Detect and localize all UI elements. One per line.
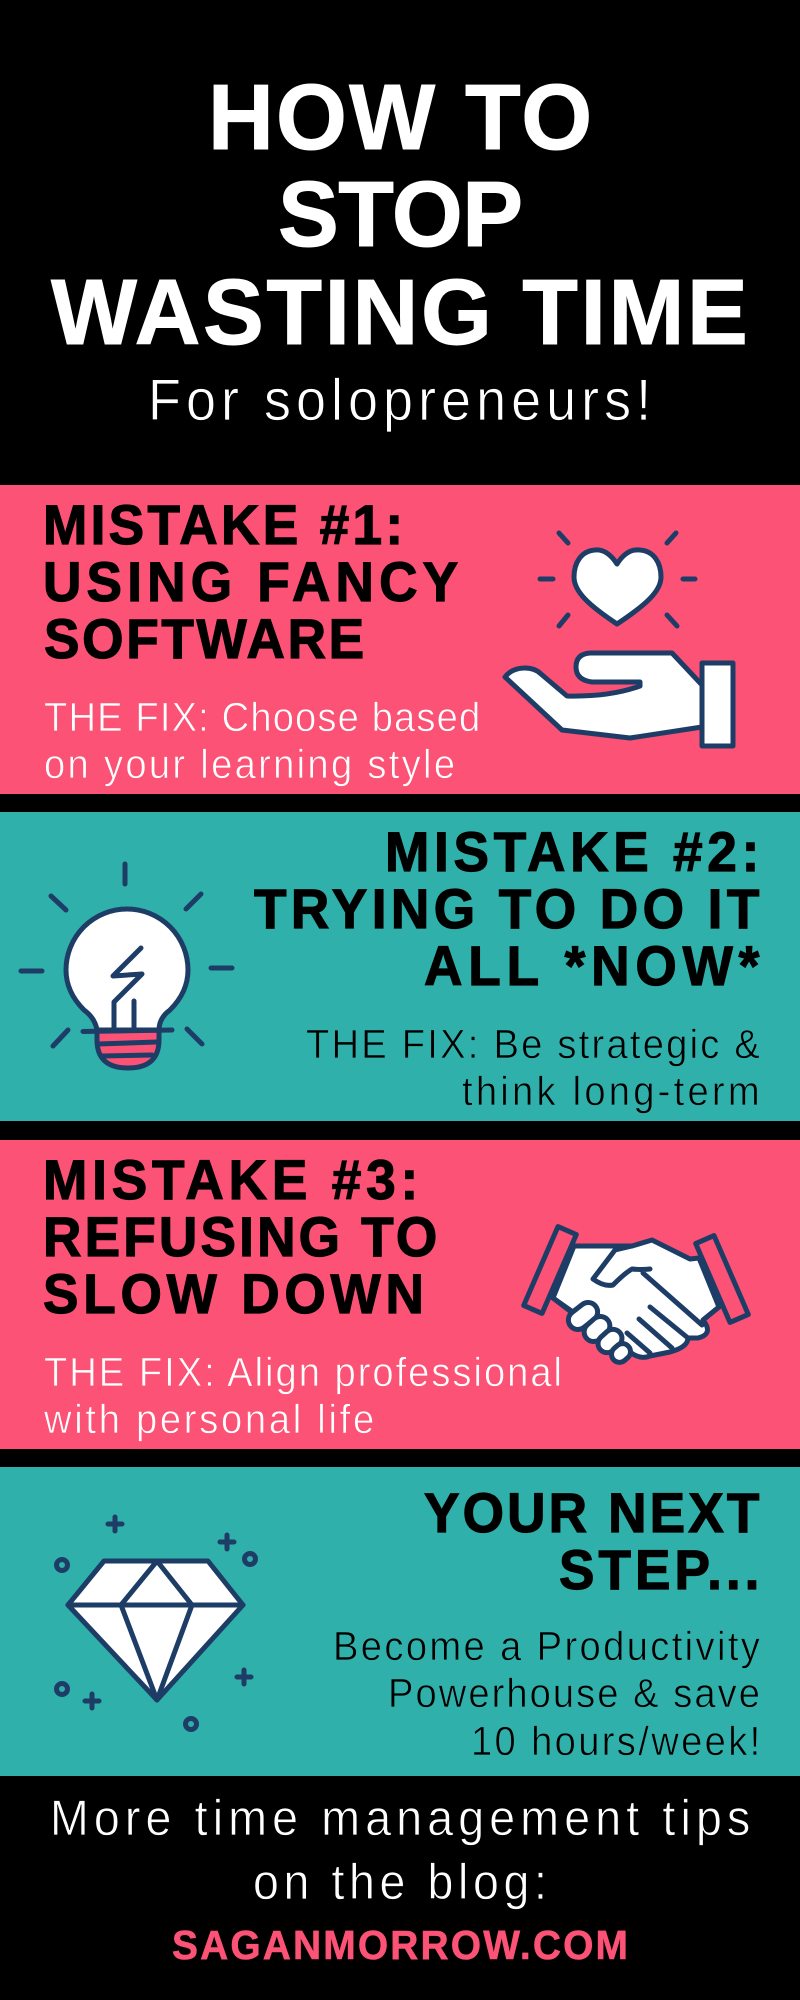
heading: next step: STEP...	[559, 1539, 759, 1601]
text: next step	[333, 1624, 760, 1764]
footer text	[50, 1790, 750, 1910]
heading: mistake 1: SOFTWARE	[44, 608, 364, 670]
text: fix 3: THE FIX: Align professional	[44, 1350, 562, 1395]
heading: mistake 2: MISTAKE #2:	[385, 821, 759, 883]
icon: light bulb	[21, 864, 232, 1068]
text: fix 3: with personal life	[43, 1397, 374, 1442]
heading: mistake 3: SLOW DOWN	[43, 1263, 424, 1325]
text: fix 3	[43, 1350, 562, 1442]
panel: mistake 1	[0, 485, 800, 794]
heading: mistake 1: MISTAKE #1:	[43, 494, 403, 556]
footer text: More time management tips	[50, 1790, 750, 1846]
icon: hand holding heart	[505, 533, 733, 746]
text: fix 1: THE FIX: Choose based	[44, 695, 480, 740]
heading: next step	[424, 1482, 759, 1601]
text: fix 1	[44, 695, 480, 787]
heading: mistake 2: TRYING TO DO IT	[254, 878, 759, 940]
heading: mistake 1: USING FANCY	[43, 551, 458, 613]
heading: mistake 3: REFUSING TO	[43, 1206, 437, 1268]
heading: mistake 1	[43, 494, 458, 670]
text: fix 1: on your learning style	[44, 742, 455, 787]
text: next step: Become a Productivity	[333, 1624, 760, 1669]
icon: diamond	[56, 1517, 256, 1730]
text: next step: Powerhouse & save	[388, 1671, 760, 1716]
title	[51, 65, 748, 364]
heading: mistake 2: ALL *NOW*	[424, 935, 760, 997]
panel: mistake 3	[0, 1140, 800, 1449]
subtitle: For solopreneurs!	[148, 367, 651, 432]
heading: mistake 3	[43, 1149, 437, 1325]
text: fix 2: think long-term	[462, 1069, 760, 1114]
text: fix 2	[306, 1022, 760, 1114]
title: STOP	[278, 162, 523, 266]
heading: mistake 3: MISTAKE #3:	[43, 1149, 418, 1211]
text: fix 2: THE FIX: Be strategic &	[306, 1022, 760, 1067]
text: next step: 10 hours/week!	[471, 1719, 760, 1764]
footer text: on the blog:	[253, 1854, 547, 1910]
footer link: SAGANMORROW.COM	[172, 1923, 628, 1968]
title: HOW TO	[208, 65, 592, 169]
panel: mistake 2	[0, 812, 800, 1121]
icon: handshake	[524, 1227, 748, 1366]
heading: mistake 2	[254, 821, 760, 997]
title: WASTING TIME	[51, 260, 748, 364]
panel: next step	[0, 1467, 800, 1776]
heading: next step: YOUR NEXT	[424, 1482, 759, 1544]
